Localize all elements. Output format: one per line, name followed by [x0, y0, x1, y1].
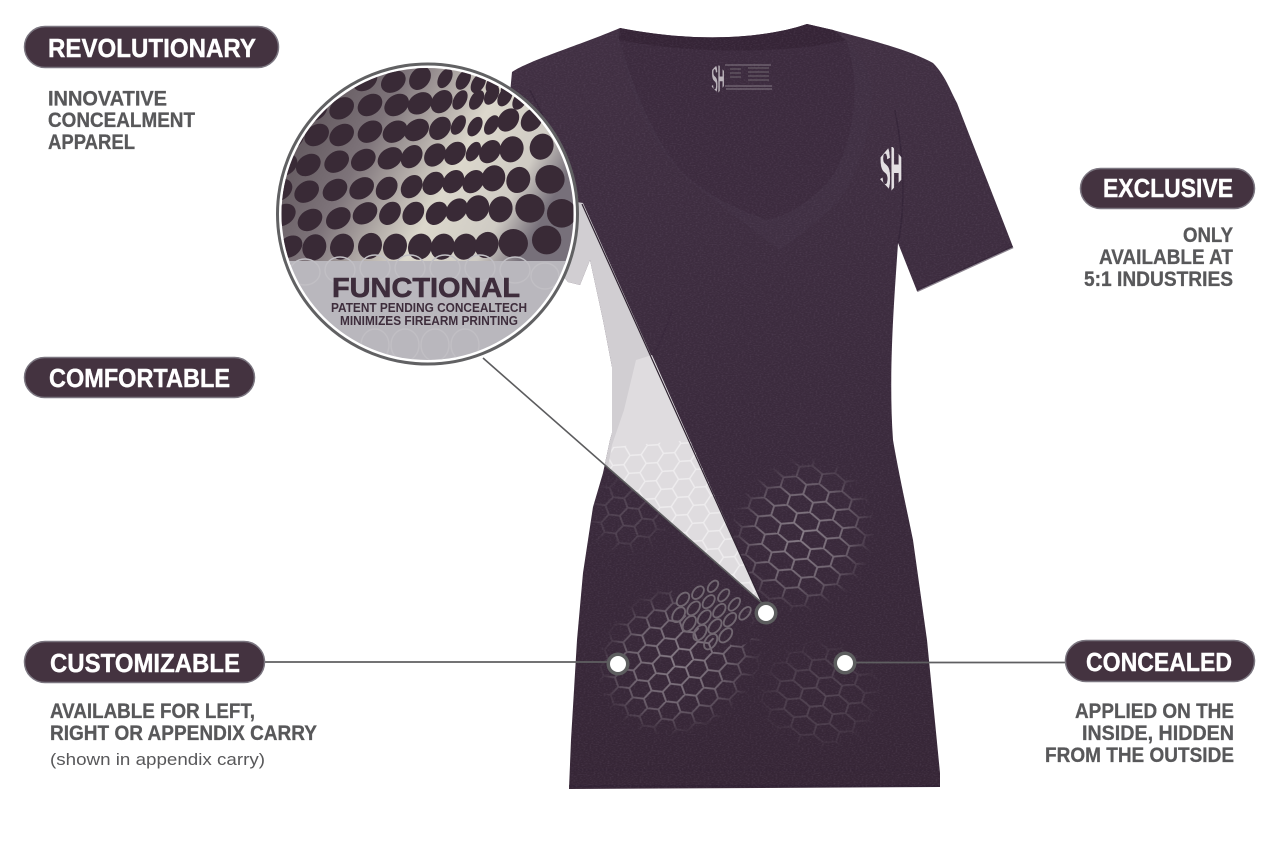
pill: concealed: CONCEALED — [1086, 647, 1232, 677]
magnified circle: functional — [263, 60, 590, 371]
converging small cells near marker — [670, 579, 753, 652]
callout: concealed — [1045, 640, 1254, 767]
connector: concealed — [855, 662, 1066, 664]
text: revolutionary: APPAREL — [48, 131, 135, 154]
text: exclusive — [1084, 224, 1233, 291]
wedge fill — [564, 202, 652, 473]
text: customizable: RIGHT OR APPENDIX CARRY — [50, 722, 317, 745]
functional heading: FUNCTIONAL — [332, 272, 520, 303]
functional description — [331, 301, 527, 328]
text: concealed: APPLIED ON THE — [1075, 700, 1234, 723]
shirt inner neck — [619, 38, 854, 220]
t-shirt — [500, 20, 1020, 795]
text: revolutionary: CONCEALMENT — [48, 109, 195, 132]
neck label — [712, 64, 772, 93]
hex pattern on shirt — [592, 462, 874, 743]
neck label: SH — [711, 59, 725, 103]
pill: comfortable — [24, 358, 254, 398]
functional description: PATENT PENDING CONCEALTECH — [331, 301, 527, 315]
pill: customizable: CUSTOMIZABLE — [50, 648, 240, 678]
connector: circle to dot — [483, 358, 762, 603]
caption band — [289, 261, 566, 360]
shirt fold lines — [530, 90, 1013, 786]
wedge lighter fold — [608, 355, 762, 603]
faint band hexes — [290, 255, 559, 361]
text: exclusive: AVAILABLE AT — [1099, 246, 1233, 269]
callout: exclusive — [1080, 168, 1254, 291]
text: customizable — [50, 700, 317, 769]
marker dot: functional — [754, 602, 778, 624]
circle ring — [278, 64, 578, 364]
pill: exclusive: EXCLUSIVE — [1103, 173, 1233, 203]
callout: revolutionary — [24, 26, 278, 154]
pill: customizable — [24, 642, 264, 682]
chest SH logo: SH — [880, 133, 902, 205]
pill: revolutionary: REVOLUTIONARY — [48, 33, 256, 63]
pill: exclusive — [1080, 168, 1254, 208]
shirt fabric grain — [500, 20, 1020, 795]
text: concealed: FROM THE OUTSIDE — [1045, 744, 1234, 767]
wedge magnified hex — [610, 441, 756, 594]
text: exclusive: 5:1 INDUSTRIES — [1084, 268, 1233, 291]
pill: concealed — [1066, 640, 1254, 682]
marker dot: concealed — [834, 652, 856, 674]
honeycomb cells — [263, 62, 576, 264]
callout: customizable — [24, 642, 317, 769]
text: revolutionary: INNOVATIVE — [48, 88, 167, 110]
pill: comfortable: COMFORTABLE — [49, 363, 230, 393]
text: customizable: (shown in appendix carry) — [50, 750, 265, 769]
connector: customizable — [265, 661, 608, 663]
text: exclusive: ONLY — [1183, 224, 1233, 247]
text: customizable: AVAILABLE FOR LEFT, — [50, 700, 255, 723]
wedge right edge — [582, 204, 762, 603]
shirt collar band — [617, 26, 872, 250]
shirt body — [500, 24, 1013, 789]
functional description: MINIMIZES FIREARM PRINTING — [340, 314, 518, 328]
circle background — [282, 68, 574, 265]
marker dot: customizable — [606, 652, 630, 676]
pill: revolutionary — [24, 26, 278, 68]
text: concealed — [1045, 700, 1234, 767]
text: concealed: INSIDE, HIDDEN — [1082, 722, 1234, 745]
shirt back neck rib — [619, 24, 846, 50]
callout wedge — [564, 202, 760, 600]
text: revolutionary — [48, 88, 195, 154]
